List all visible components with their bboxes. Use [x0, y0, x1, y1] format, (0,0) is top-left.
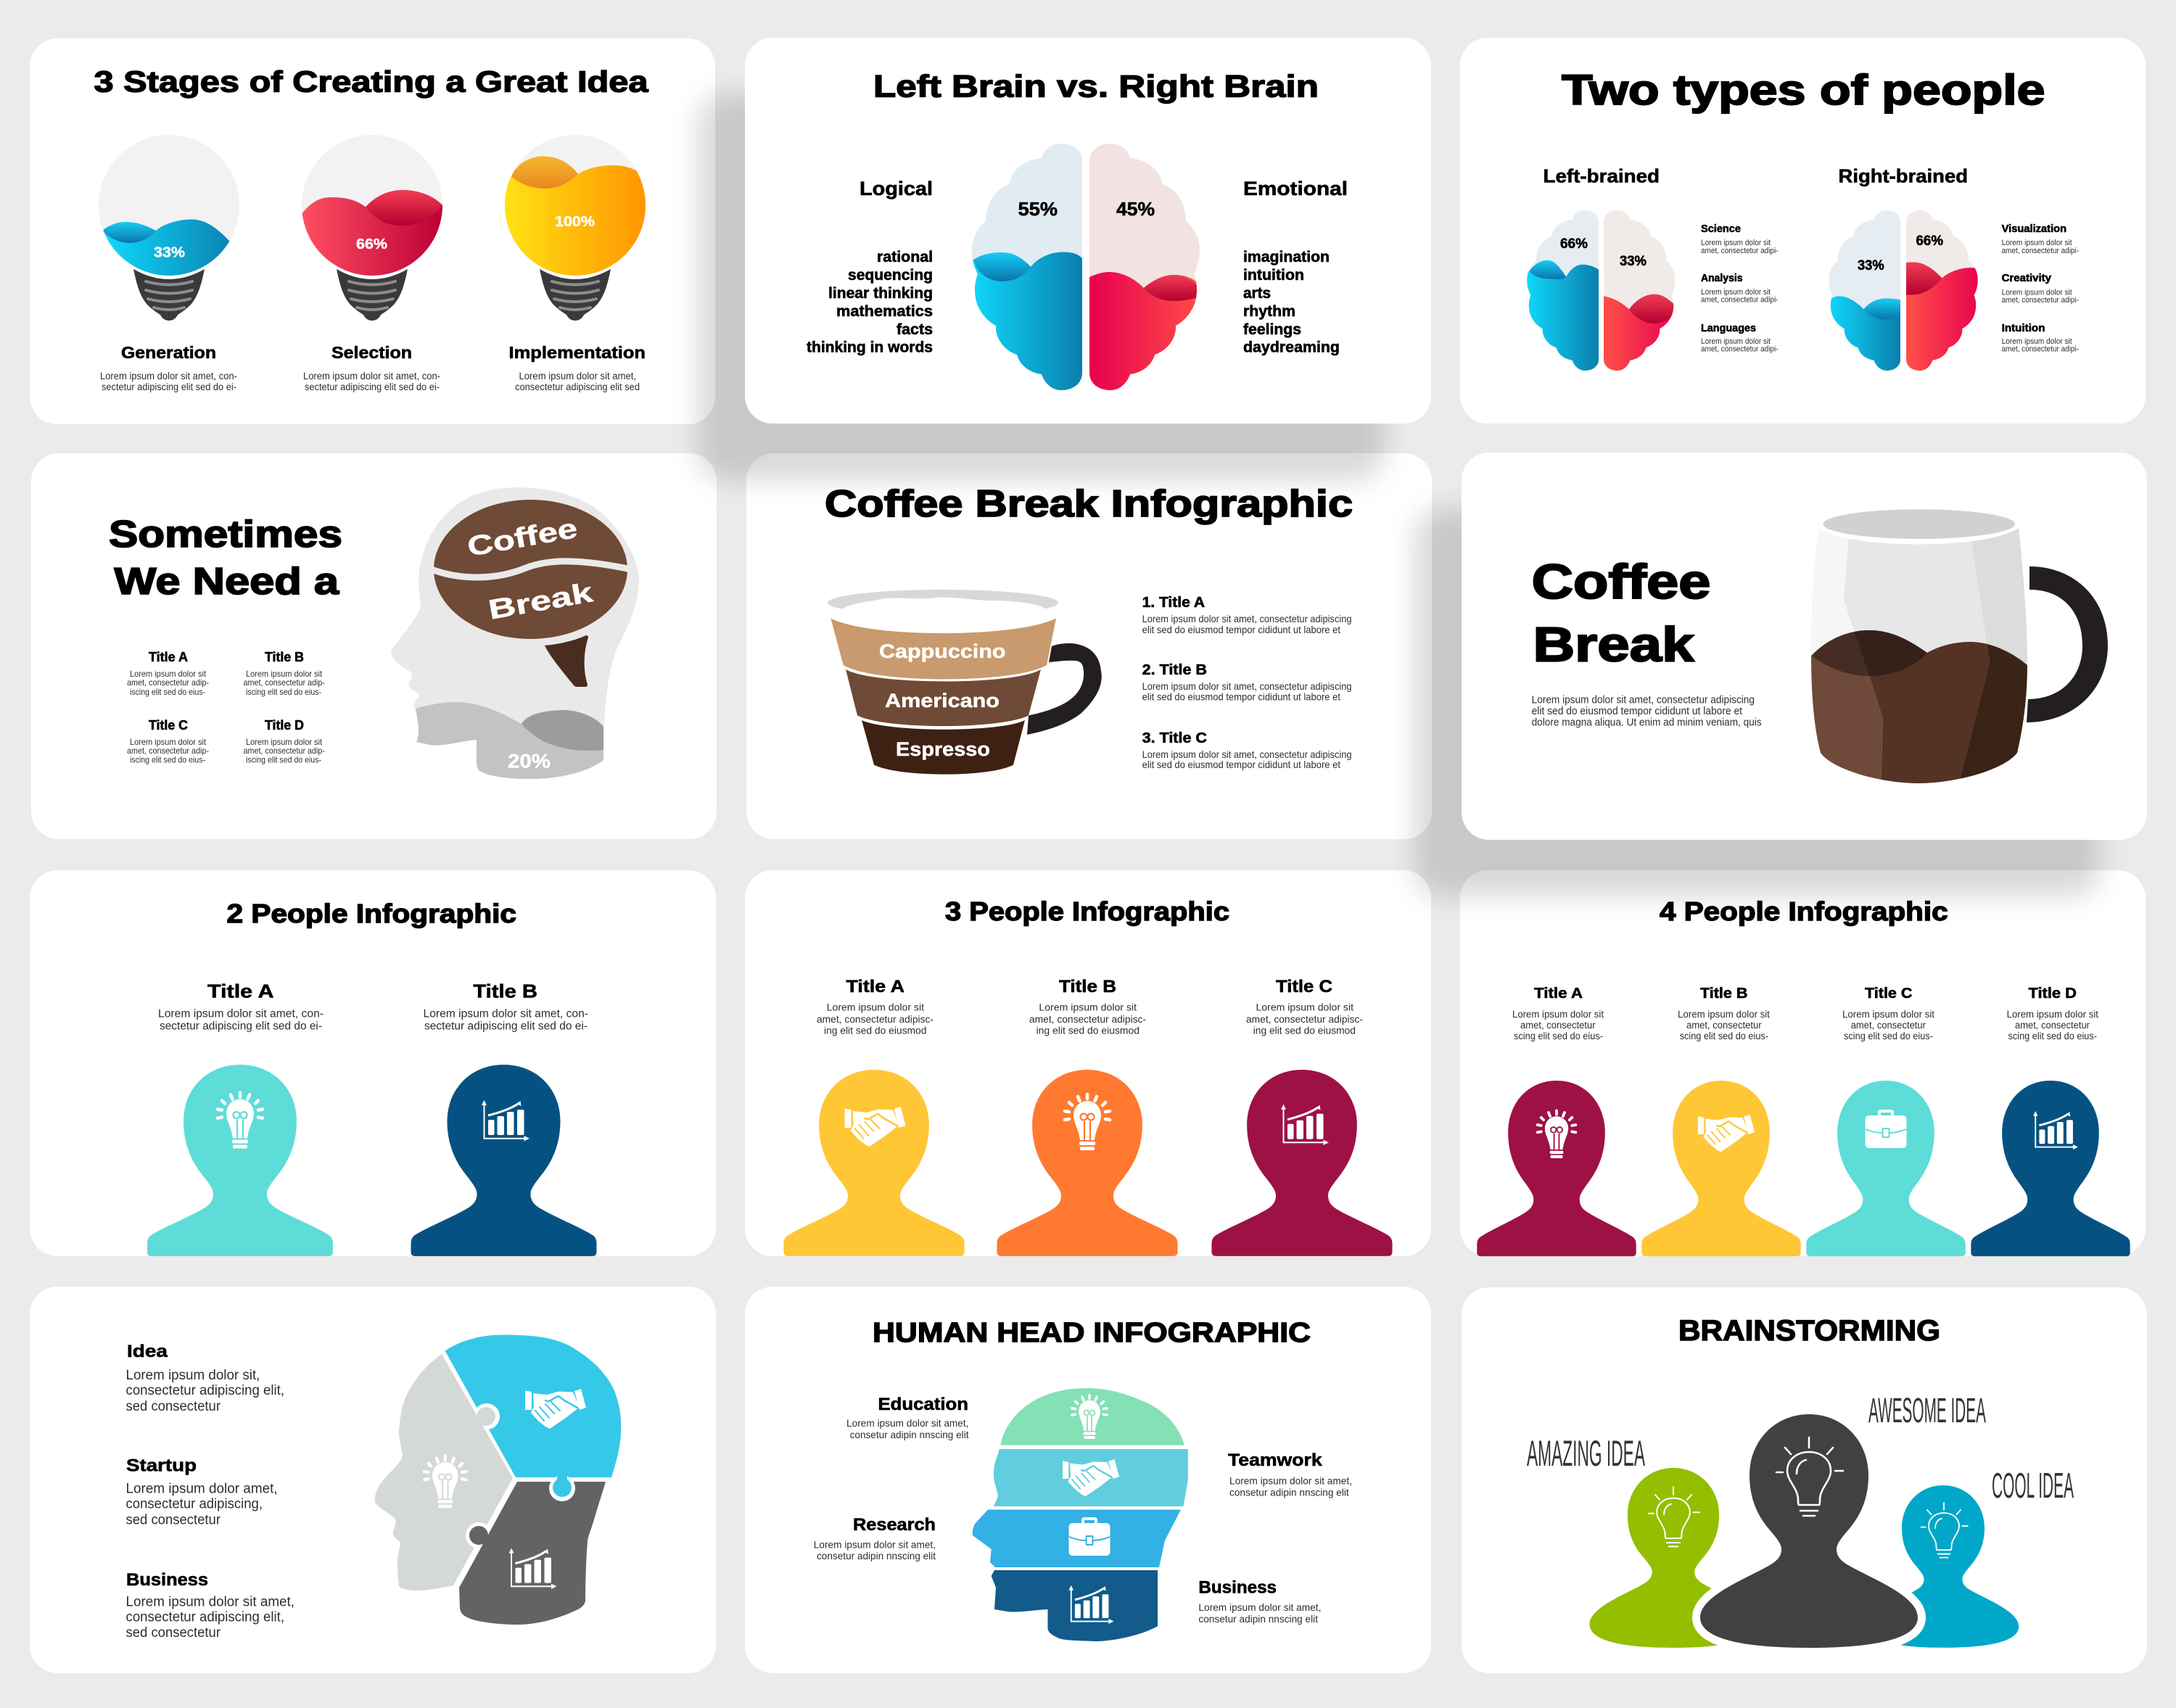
text: right-brained items: amet, consectetur adipi- [2002, 345, 2079, 354]
text: research: Research [853, 1515, 936, 1535]
text: business [1198, 1577, 1321, 1625]
text: title C: ing elit sed do eiusmod [1253, 1024, 1356, 1036]
text: business: consetur adipin nnscing elit [1198, 1613, 1318, 1625]
text: 3. title C [1142, 730, 1352, 770]
text: right-brained items: amet, consectetur adipi- [2002, 247, 2079, 255]
text: research [814, 1515, 936, 1561]
text: title B: iscing elit sed do eius- [246, 687, 321, 697]
text: left-brained items: amet, consectetur adipi- [1701, 247, 1779, 255]
text: business: Lorem ipsum dolor sit amet, [1198, 1601, 1321, 1613]
text: title C: amet, consectetur adipisc- [1246, 1013, 1363, 1025]
heading: left-brained: Left-brained [1544, 165, 1660, 187]
band: teamwork [994, 1449, 1188, 1506]
text: logical: mathematics [836, 303, 933, 320]
bulb chart: 66% selection: 66% [356, 236, 387, 252]
text: title B: Title B [1059, 977, 1116, 997]
text: title A: Lorem ipsum dolor sit [827, 1002, 924, 1013]
text: title D: amet, consectetur adip- [244, 746, 325, 756]
text: title C [1842, 986, 1934, 1041]
text: 1. title A: elit sed do eiusmod tempor cididunt ut labore et [1142, 624, 1340, 635]
text: title D: Lorem ipsum dolor sit [246, 737, 323, 747]
head with coffee bean brain: Break [486, 577, 596, 626]
text: title B: Lorem ipsum dolor sit amet, con- [424, 1008, 588, 1020]
text: business: consectetur adipiscing elit, [126, 1610, 284, 1625]
text: emotional [1243, 178, 1348, 356]
person D with chart [1971, 1081, 2130, 1256]
text: title D: Lorem ipsum dolor sit [2007, 1009, 2098, 1020]
layered coffee cup: Espresso [896, 738, 990, 760]
text: title D [2007, 986, 2098, 1041]
brain: left-brained: 33% [1620, 254, 1647, 269]
text: title A: sectetur adipiscing elit sed do ei- [160, 1020, 322, 1033]
head with coffee bean brain [391, 487, 639, 779]
person B with handshake [1641, 1081, 1801, 1256]
text: business: Business [1198, 1577, 1277, 1597]
text: generation: Generation [121, 343, 216, 362]
text: idea: Idea [127, 1342, 168, 1361]
text: right-brained items: Visualization [2002, 223, 2066, 235]
text: title A: Lorem ipsum dolor sit amet, con- [158, 1008, 323, 1020]
text: title C: Title C [1276, 977, 1332, 997]
text block [1532, 693, 1762, 729]
person B with chart [411, 1065, 596, 1256]
person C with briefcase [1806, 1081, 1966, 1256]
text: title C: Title C [1865, 986, 1912, 1002]
text: implementation: consectetur adipiscing elit sed [515, 381, 640, 392]
text: title A [158, 980, 323, 1033]
text: title B [244, 650, 325, 697]
text: logical: rational [877, 249, 933, 265]
brain: left hemisphere 55%: 55% [1018, 198, 1058, 220]
panel: coffee break mug [1462, 453, 2147, 840]
text: emotional: imagination [1243, 249, 1330, 265]
text: emotional: rhythm [1243, 303, 1295, 320]
text: right-brained items: Creativity [2002, 272, 2052, 284]
text: education: Lorem ipsum dolor sit amet, [846, 1417, 969, 1429]
head with coffee bean brain: 20% [508, 750, 551, 772]
text: selection: Lorem ipsum dolor sit amet, con- [303, 371, 440, 381]
shadow: coffee mug panel [1414, 509, 2100, 896]
brain: right hemisphere 45% [1089, 144, 1206, 397]
text: generation: Lorem ipsum dolor sit amet, con- [100, 371, 237, 381]
text: left-brained items: Lorem ipsum dolor sit [1701, 337, 1771, 346]
text: title D: scing elit sed do eius- [2008, 1031, 2097, 1041]
text: title C: iscing elit sed do eius- [130, 755, 205, 765]
brain: left hemisphere 55% [966, 144, 1082, 397]
text: logical [807, 178, 933, 356]
text: emotional: daydreaming [1243, 339, 1340, 356]
text: title A [817, 977, 934, 1036]
layered coffee cup [828, 590, 1102, 775]
panel: idea startup business puzzle head [30, 1287, 716, 1673]
text: title B [1029, 977, 1146, 1036]
brain: right-brained [1825, 210, 1982, 376]
person A with bulb [147, 1065, 333, 1256]
text: title B: amet, consectetur [1686, 1020, 1762, 1031]
title: Sometimes [109, 513, 342, 556]
text: generation [100, 343, 237, 392]
blue person with bulb [1868, 1485, 2019, 1648]
text: teamwork: consetur adipin nnscing elit [1229, 1487, 1349, 1498]
band: education [1001, 1388, 1184, 1445]
text: title C: Lorem ipsum dolor sit [1256, 1002, 1353, 1013]
bulb chart: 100% implementation: 100% [555, 214, 595, 230]
title: 2 People Infographic [226, 899, 516, 928]
text: education: consetur adipin nnscing elit [850, 1429, 969, 1440]
text: left-brained items: Analysis [1701, 272, 1742, 284]
text: title A: ing elit sed do eiusmod [824, 1024, 926, 1036]
panel: coffee break infographic [746, 453, 1432, 839]
panel: two types of people [1460, 38, 2146, 424]
text: title C: Lorem ipsum dolor sit [130, 737, 207, 747]
brain: left-brained: 66% [1560, 236, 1588, 252]
text: teamwork: Teamwork [1228, 1451, 1322, 1470]
text: title A: iscing elit sed do eius- [130, 687, 205, 697]
text: 1. title A: 1. Title A [1142, 595, 1205, 611]
panel: brainstorming: AMAZING IDEA [1527, 1433, 1645, 1474]
text: emotional: feelings [1243, 321, 1301, 338]
layered coffee cup: Cappuccino [879, 640, 1005, 662]
text: right-brained items: Lorem ipsum dolor sit [2002, 337, 2072, 346]
text: left-brained items: Lorem ipsum dolor sit [1701, 239, 1771, 247]
text: 2. title B: elit sed do eiusmod tempor cididunt ut labore et [1142, 690, 1340, 702]
text: idea: Lorem ipsum dolor sit, [126, 1368, 260, 1383]
text: logical: sequencing [848, 267, 933, 284]
text: startup: sed consectetur [126, 1513, 221, 1528]
text: startup: Lorem ipsum dolor amet, [126, 1482, 278, 1497]
text: idea: consectetur adipiscing elit, [126, 1383, 284, 1398]
text: business: Business [126, 1570, 208, 1590]
title [109, 513, 342, 603]
text: title B [424, 980, 588, 1033]
brain: right hemisphere 45%: 45% [1116, 198, 1155, 220]
text: logical: thinking in words [807, 339, 933, 356]
text: title D [244, 718, 325, 765]
text: title B: ing elit sed do eiusmod [1037, 1024, 1139, 1036]
text: left-brained items: Science [1701, 223, 1741, 235]
title: We Need a [115, 561, 339, 603]
text: title A [1512, 986, 1604, 1041]
text: title A [127, 650, 209, 697]
text: title B: amet, consectetur adipisc- [1029, 1013, 1146, 1025]
text block: Lorem ipsum dolor sit amet, consectetur adipiscing [1532, 693, 1755, 706]
text: research: Lorem ipsum dolor sit amet, [814, 1539, 936, 1551]
title: Left Brain vs. Right Brain [873, 70, 1319, 104]
text: 2. title B: 2. Title B [1142, 662, 1207, 678]
text: selection: sectetur adipiscing elit sed do ei- [305, 381, 440, 392]
text: title C: scing elit sed do eius- [1844, 1031, 1933, 1041]
text: right-brained items [2002, 223, 2079, 354]
text: logical: Logical [860, 178, 933, 199]
text: title C [127, 718, 209, 765]
heading: right-brained: Right-brained [1838, 165, 1968, 187]
brain: left-brained [1523, 210, 1677, 376]
text: right-brained items: Intuition [2002, 322, 2045, 334]
coffee mug [1799, 508, 2108, 791]
text: title B: Lorem ipsum dolor sit [246, 669, 323, 679]
text: emotional: arts [1243, 285, 1271, 302]
text: title B: Lorem ipsum dolor sit [1039, 1002, 1137, 1013]
text: title B: amet, consectetur adip- [244, 677, 325, 688]
shadow: left brain panel [698, 94, 1384, 480]
title: Coffee Break Infographic [825, 483, 1353, 525]
text: title B: Title B [473, 980, 537, 1002]
text: teamwork [1228, 1451, 1352, 1498]
layered coffee cup: Americano [885, 690, 1000, 711]
text: selection: Selection [331, 343, 412, 362]
text: startup [126, 1456, 278, 1528]
brain: right-brained: 66% [1916, 234, 1943, 249]
text: left-brained items: amet, consectetur adipi- [1701, 345, 1779, 354]
text: 1. title A: Lorem ipsum dolor sit amet, consectetur adipiscing [1142, 613, 1352, 624]
text: education: Education [878, 1395, 968, 1414]
text: 1. title A [1142, 595, 1352, 635]
text: left-brained items [1701, 223, 1779, 354]
text: generation: sectetur adipiscing elit sed do ei- [102, 381, 236, 392]
panel: sometimes we need a coffee break [31, 453, 717, 839]
text: title A: Lorem ipsum dolor sit [1512, 1009, 1604, 1020]
text: emotional: intuition [1243, 267, 1304, 284]
title: 3 Stages of Creating a Great Idea [94, 65, 649, 99]
text: title C [1246, 977, 1363, 1036]
text: research: consetur adipin nnscing elit [817, 1550, 936, 1561]
brain: right-brained: 33% [1858, 258, 1884, 273]
text: title A: amet, consectetur adip- [127, 677, 209, 688]
text: title B: scing elit sed do eius- [1680, 1031, 1768, 1041]
green person with bulb [1590, 1468, 1757, 1648]
person B with bulb [997, 1070, 1178, 1256]
text: title A: Title A [1534, 986, 1583, 1002]
person A with bulb [1477, 1081, 1636, 1256]
title: 3 People Infographic [945, 896, 1229, 926]
title: Two types of people [1562, 67, 2045, 114]
text: 2. title B [1142, 662, 1352, 702]
text: title A: Title A [207, 980, 274, 1002]
text: title B: Title B [1700, 986, 1747, 1002]
bulb chart: 66% selection [302, 135, 442, 321]
text: title C: amet, consectetur adip- [127, 746, 209, 756]
puzzle head [375, 1334, 621, 1625]
band: research [973, 1510, 1181, 1567]
title: 4 People Infographic [1660, 896, 1948, 926]
text: idea [126, 1342, 284, 1414]
head with coffee bean brain: Coffee [465, 513, 580, 563]
panel: brainstorming [1462, 1287, 2147, 1673]
text: title C: Title C [149, 718, 188, 733]
text: title D: amet, consectetur [2015, 1020, 2090, 1031]
text: left-brained items: Lorem ipsum dolor sit [1701, 288, 1771, 297]
panel: human head infographic [745, 1287, 1431, 1673]
text: business: Lorem ipsum dolor sit amet, [126, 1595, 294, 1610]
band: business [992, 1570, 1158, 1641]
text: business [126, 1570, 294, 1641]
text block: dolore magna aliqua. Ut enim ad minim veniam, quis [1532, 717, 1762, 729]
panel: 3 people infographic [745, 870, 1431, 1256]
text: teamwork: Lorem ipsum dolor sit amet, [1229, 1475, 1352, 1487]
bulb chart: 33% generation [99, 135, 239, 321]
text: selection [303, 343, 440, 392]
text: title A: Title A [846, 977, 904, 997]
text: implementation: Lorem ipsum dolor sit amet, [519, 371, 636, 381]
text: title A: Title A [149, 650, 188, 664]
title: HUMAN HEAD INFOGRAPHIC [873, 1318, 1311, 1348]
text: title A: Lorem ipsum dolor sit [130, 669, 207, 679]
bulb chart: 33% generation: 33% [154, 245, 185, 261]
text: title D: iscing elit sed do eius- [246, 755, 321, 765]
text: title B: sectetur adipiscing elit sed do ei- [424, 1020, 588, 1033]
text: implementation [509, 343, 646, 392]
person C with chart [1211, 1070, 1393, 1256]
person A with handshake [783, 1070, 965, 1256]
text: right-brained items: Lorem ipsum dolor sit [2002, 289, 2072, 297]
title: Break [1533, 618, 1694, 672]
title: BRAINSTORMING [1678, 1315, 1940, 1347]
text: title C: Lorem ipsum dolor sit [1842, 1009, 1934, 1020]
text: title D: Title D [2028, 986, 2077, 1002]
title [1532, 555, 1710, 672]
text: title B [1678, 986, 1770, 1041]
text: title A: amet, consectetur adipisc- [817, 1013, 934, 1025]
text: title C: amet, consectetur [1851, 1020, 1926, 1031]
text: logical: facts [897, 321, 933, 338]
text: implementation: Implementation [509, 343, 646, 362]
text: business: sed consectetur [126, 1625, 221, 1641]
panel: brainstorming: AWESOME IDEA [1868, 1392, 1986, 1430]
text: startup: consectetur adipiscing, [126, 1497, 263, 1511]
panel: 4 people infographic [1460, 870, 2146, 1256]
text: idea: sed consectetur [126, 1399, 221, 1414]
text: education [846, 1395, 969, 1440]
dark person with bulb [1700, 1414, 1918, 1648]
title: Coffee [1532, 555, 1710, 609]
text block: elit sed do eiusmod tempor cididunt ut labore et [1532, 705, 1743, 717]
text: right-brained items: Lorem ipsum dolor sit [2002, 239, 2072, 247]
text: 3. title C: elit sed do eiusmod tempor cididunt ut labore et [1142, 759, 1340, 770]
text: startup: Startup [126, 1456, 197, 1476]
text: 3. title C: Lorem ipsum dolor sit amet, consectetur adipiscing [1142, 748, 1352, 760]
text: title B: Title B [265, 650, 304, 664]
panel: 2 people infographic [30, 870, 716, 1256]
text: title A: amet, consectetur [1520, 1020, 1596, 1031]
text: title A: scing elit sed do eius- [1514, 1031, 1603, 1041]
text: left-brained items: Languages [1701, 322, 1756, 334]
panel: 3 stages of creating a great idea [30, 38, 715, 424]
text: emotional: Emotional [1243, 178, 1348, 199]
text: logical: linear thinking [828, 285, 933, 302]
text: left-brained items: amet, consectetur adipi- [1701, 296, 1779, 305]
text: 3. title C: 3. Title C [1142, 730, 1207, 746]
bulb chart: 100% implementation [505, 135, 646, 321]
text: title B: Lorem ipsum dolor sit [1678, 1009, 1770, 1020]
text: 2. title B: Lorem ipsum dolor sit amet, consectetur adipiscing [1142, 680, 1352, 692]
text: title D: Title D [265, 718, 304, 733]
panel: left brain vs right brain [745, 38, 1431, 424]
text: right-brained items: amet, consectetur adipi- [2002, 296, 2079, 305]
